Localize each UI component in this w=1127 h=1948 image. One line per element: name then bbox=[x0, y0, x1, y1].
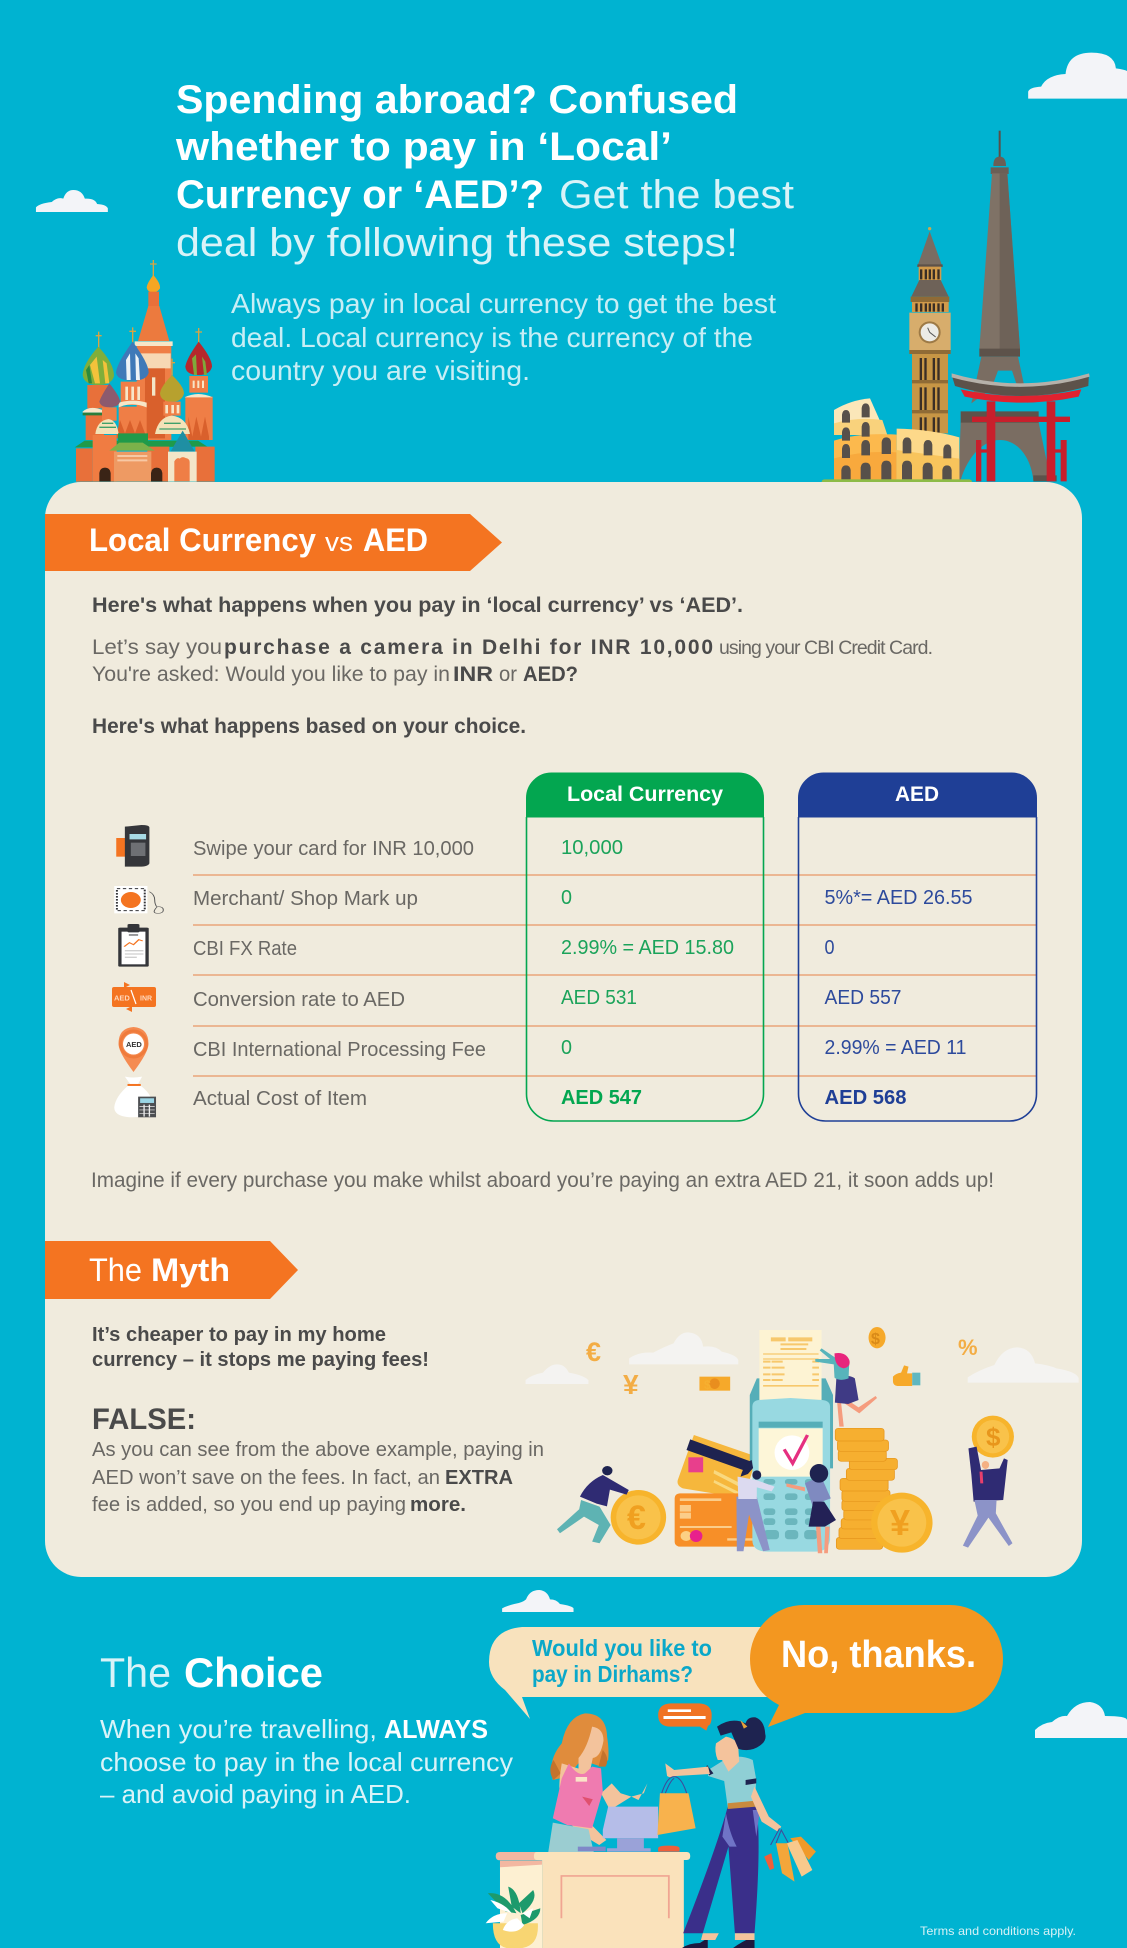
currency symbols: ¥ bbox=[890, 1502, 910, 1543]
table bbox=[112, 773, 1037, 1121]
icon: Colosseum bbox=[822, 398, 972, 485]
person: receipt woman bbox=[836, 1393, 877, 1427]
currency symbols bbox=[586, 1331, 1001, 1543]
column: Local Currency: 10,000 bbox=[561, 836, 623, 859]
myth text: As you can see from the above example, paying in bbox=[92, 1438, 544, 1461]
row labels: Merchant/ Shop Mark up bbox=[193, 887, 418, 910]
title: Currency or ‘AED’? bbox=[176, 173, 544, 217]
coin stack bbox=[835, 1428, 897, 1549]
currency symbols: € bbox=[627, 1499, 646, 1537]
row labels: Swipe your card for INR 10,000 bbox=[193, 837, 474, 860]
speech bubble: question: pay in Dirhams? bbox=[532, 1661, 693, 1687]
icon: conversion rate: AED bbox=[114, 994, 130, 1002]
person: dollar man bbox=[968, 1447, 1008, 1502]
heading banner: The Myth: Myth bbox=[151, 1252, 230, 1288]
illustration: payment terminal with coins and people bbox=[526, 1327, 1079, 1553]
intro text: AED? bbox=[523, 663, 578, 686]
intro text: Here's what happens when you pay in ‘local currency’ vs ‘AED’. bbox=[92, 594, 743, 617]
icon: location pin bbox=[118, 1027, 148, 1072]
row labels bbox=[193, 837, 486, 1110]
person: center woman bbox=[786, 1483, 830, 1553]
row labels: Actual Cost of Item bbox=[193, 1087, 367, 1110]
speech bubble: answer bbox=[750, 1605, 1003, 1727]
intro text: using your CBI Credit Card. bbox=[719, 637, 933, 659]
section: The Choice: When you’re travelling, bbox=[100, 1714, 377, 1744]
column: Local Currency: 0 bbox=[561, 1036, 572, 1059]
clouds bbox=[526, 1332, 1079, 1384]
icon: Big Ben bbox=[909, 227, 951, 433]
column: AED: 0 bbox=[824, 936, 834, 959]
row labels: Conversion rate to AED bbox=[193, 988, 405, 1011]
column: AED: AED 557 bbox=[824, 986, 902, 1009]
myth text: EXTRA bbox=[445, 1466, 513, 1489]
icon: merchant markup bbox=[114, 886, 163, 913]
small domes bbox=[99, 383, 120, 407]
plant and pot bbox=[493, 1923, 538, 1948]
column: AED: 5%*= AED 26.55 bbox=[824, 886, 972, 909]
heading banner: Local Currency vs AED: vs bbox=[325, 527, 353, 557]
shopping bag in hand bbox=[662, 1777, 687, 1793]
subtitle text: Always pay in local currency to get the best bbox=[231, 288, 776, 319]
cards bbox=[678, 1435, 757, 1498]
left dome tower bbox=[86, 385, 109, 440]
column: AED: AED 568 bbox=[824, 1086, 906, 1109]
intro text: purchase a camera in Delhi for INR 10,000 bbox=[224, 636, 713, 659]
currency symbols: $ bbox=[986, 1422, 1001, 1452]
currency symbols: % bbox=[958, 1335, 978, 1360]
base bbox=[75, 433, 207, 447]
currency symbols: $ bbox=[871, 1331, 880, 1348]
icon: location pin: AED bbox=[126, 1040, 142, 1049]
section: The Choice bbox=[100, 1649, 513, 1809]
heading banner: Local Currency vs AED: Local Currency bbox=[89, 522, 316, 558]
counter bbox=[496, 1852, 543, 1860]
icon: conversion rate bbox=[112, 982, 156, 1012]
heading banner: Local Currency vs AED bbox=[45, 514, 502, 571]
speech bubble: answer: No, thanks. bbox=[781, 1634, 976, 1676]
section: The Choice: Choice bbox=[184, 1649, 323, 1696]
myth text: currency – it stops me paying fees! bbox=[92, 1348, 429, 1371]
column: AED: 2.99% = AED 11 bbox=[824, 1036, 966, 1059]
column: AED: AED bbox=[895, 783, 939, 806]
subtitle text bbox=[231, 288, 776, 386]
column: Local Currency: AED 531 bbox=[561, 986, 637, 1009]
title: Spending abroad? Confused bbox=[176, 78, 738, 122]
currency symbols: $ bbox=[704, 1378, 711, 1392]
illustration: shop counter scene bbox=[486, 1703, 816, 1948]
speech bubble: question bbox=[489, 1627, 790, 1719]
terminal front bbox=[752, 1398, 830, 1552]
column: Local Currency bbox=[526, 773, 764, 1121]
column: Local Currency: 2.99% = AED 15.80 bbox=[561, 936, 734, 959]
title: Get the best bbox=[559, 173, 794, 217]
title: deal by following these steps! bbox=[176, 221, 738, 265]
icon: money bag and calculator bbox=[114, 1077, 156, 1117]
person: euro man bbox=[557, 1500, 611, 1543]
myth text bbox=[92, 1323, 544, 1516]
myth text: more. bbox=[410, 1493, 466, 1516]
subtitle text: deal. Local currency is the currency of the bbox=[231, 322, 753, 353]
shopping bags bbox=[771, 1828, 788, 1845]
row labels: CBI FX Rate bbox=[193, 937, 297, 960]
panel: main card bbox=[45, 482, 1082, 1577]
cloud: above bubble bbox=[502, 1590, 574, 1612]
currency symbols: € bbox=[586, 1337, 601, 1367]
intro text: You're asked: Would you like to pay in bbox=[92, 663, 450, 686]
heading banner: The Myth: The bbox=[89, 1252, 142, 1288]
receipt bbox=[759, 1330, 822, 1400]
subtitle text: country you are visiting. bbox=[231, 355, 530, 386]
column: AED bbox=[798, 773, 1036, 1121]
row labels: CBI International Processing Fee bbox=[193, 1038, 486, 1061]
column: Local Currency: 0 bbox=[561, 886, 572, 909]
heading banner: Local Currency vs AED: AED bbox=[363, 522, 428, 558]
icon: Saint Basil's Cathedral bbox=[75, 260, 215, 482]
keypad bbox=[763, 1479, 817, 1539]
right dome tower bbox=[185, 376, 213, 440]
intro text: Let’s say you bbox=[92, 636, 222, 659]
icon: Eiffel Tower bbox=[952, 131, 1090, 481]
monitor bbox=[603, 1807, 658, 1838]
intro text: or bbox=[499, 663, 517, 686]
myth text: It’s cheaper to pay in my home bbox=[92, 1323, 386, 1346]
cloud: top right bbox=[1028, 53, 1127, 99]
column: Local Currency: Local Currency bbox=[567, 783, 723, 806]
icon: conversion rate: INR bbox=[140, 996, 152, 1002]
intro text bbox=[92, 594, 933, 738]
heading banner: The Myth bbox=[45, 1241, 298, 1299]
speech bubble: question: Would you like to bbox=[532, 1635, 712, 1661]
customer bbox=[683, 1807, 759, 1933]
small speech bubble bbox=[658, 1703, 712, 1731]
person: center man bbox=[736, 1497, 770, 1551]
section: The Choice: The bbox=[100, 1649, 171, 1696]
icon: clipboard bbox=[118, 924, 149, 967]
section: The Choice: choose to pay in the local currency bbox=[100, 1747, 513, 1777]
closing note: Imagine if every purchase you make whilst aboard you’re paying an extra AED 21, it soon adds up! bbox=[91, 1169, 994, 1192]
terms note: Terms and conditions apply. bbox=[920, 1924, 1076, 1938]
intro text: Here's what happens based on your choice. bbox=[92, 715, 526, 738]
column: Local Currency: AED 547 bbox=[561, 1086, 642, 1109]
currency symbols: ¥ bbox=[623, 1369, 639, 1400]
blue dome tower bbox=[119, 382, 147, 440]
myth text: FALSE: bbox=[92, 1403, 196, 1436]
cashier body bbox=[551, 1713, 609, 1780]
section: The Choice: ALWAYS bbox=[384, 1714, 488, 1744]
intro text: INR bbox=[453, 663, 493, 686]
coins bbox=[871, 1493, 933, 1553]
myth text: AED won’t save on the fees. In fact, an bbox=[92, 1466, 440, 1489]
title bbox=[175, 78, 794, 265]
terminal back bbox=[750, 1378, 833, 1468]
cloud: top left bbox=[36, 190, 108, 212]
title: whether to pay in ‘Local’ bbox=[175, 125, 672, 169]
icon: card terminal bbox=[116, 825, 149, 867]
section: The Choice: – and avoid paying in AED. bbox=[100, 1779, 411, 1809]
cloud: right bbox=[1035, 1702, 1127, 1738]
myth text: fee is added, so you end up paying bbox=[92, 1493, 406, 1516]
